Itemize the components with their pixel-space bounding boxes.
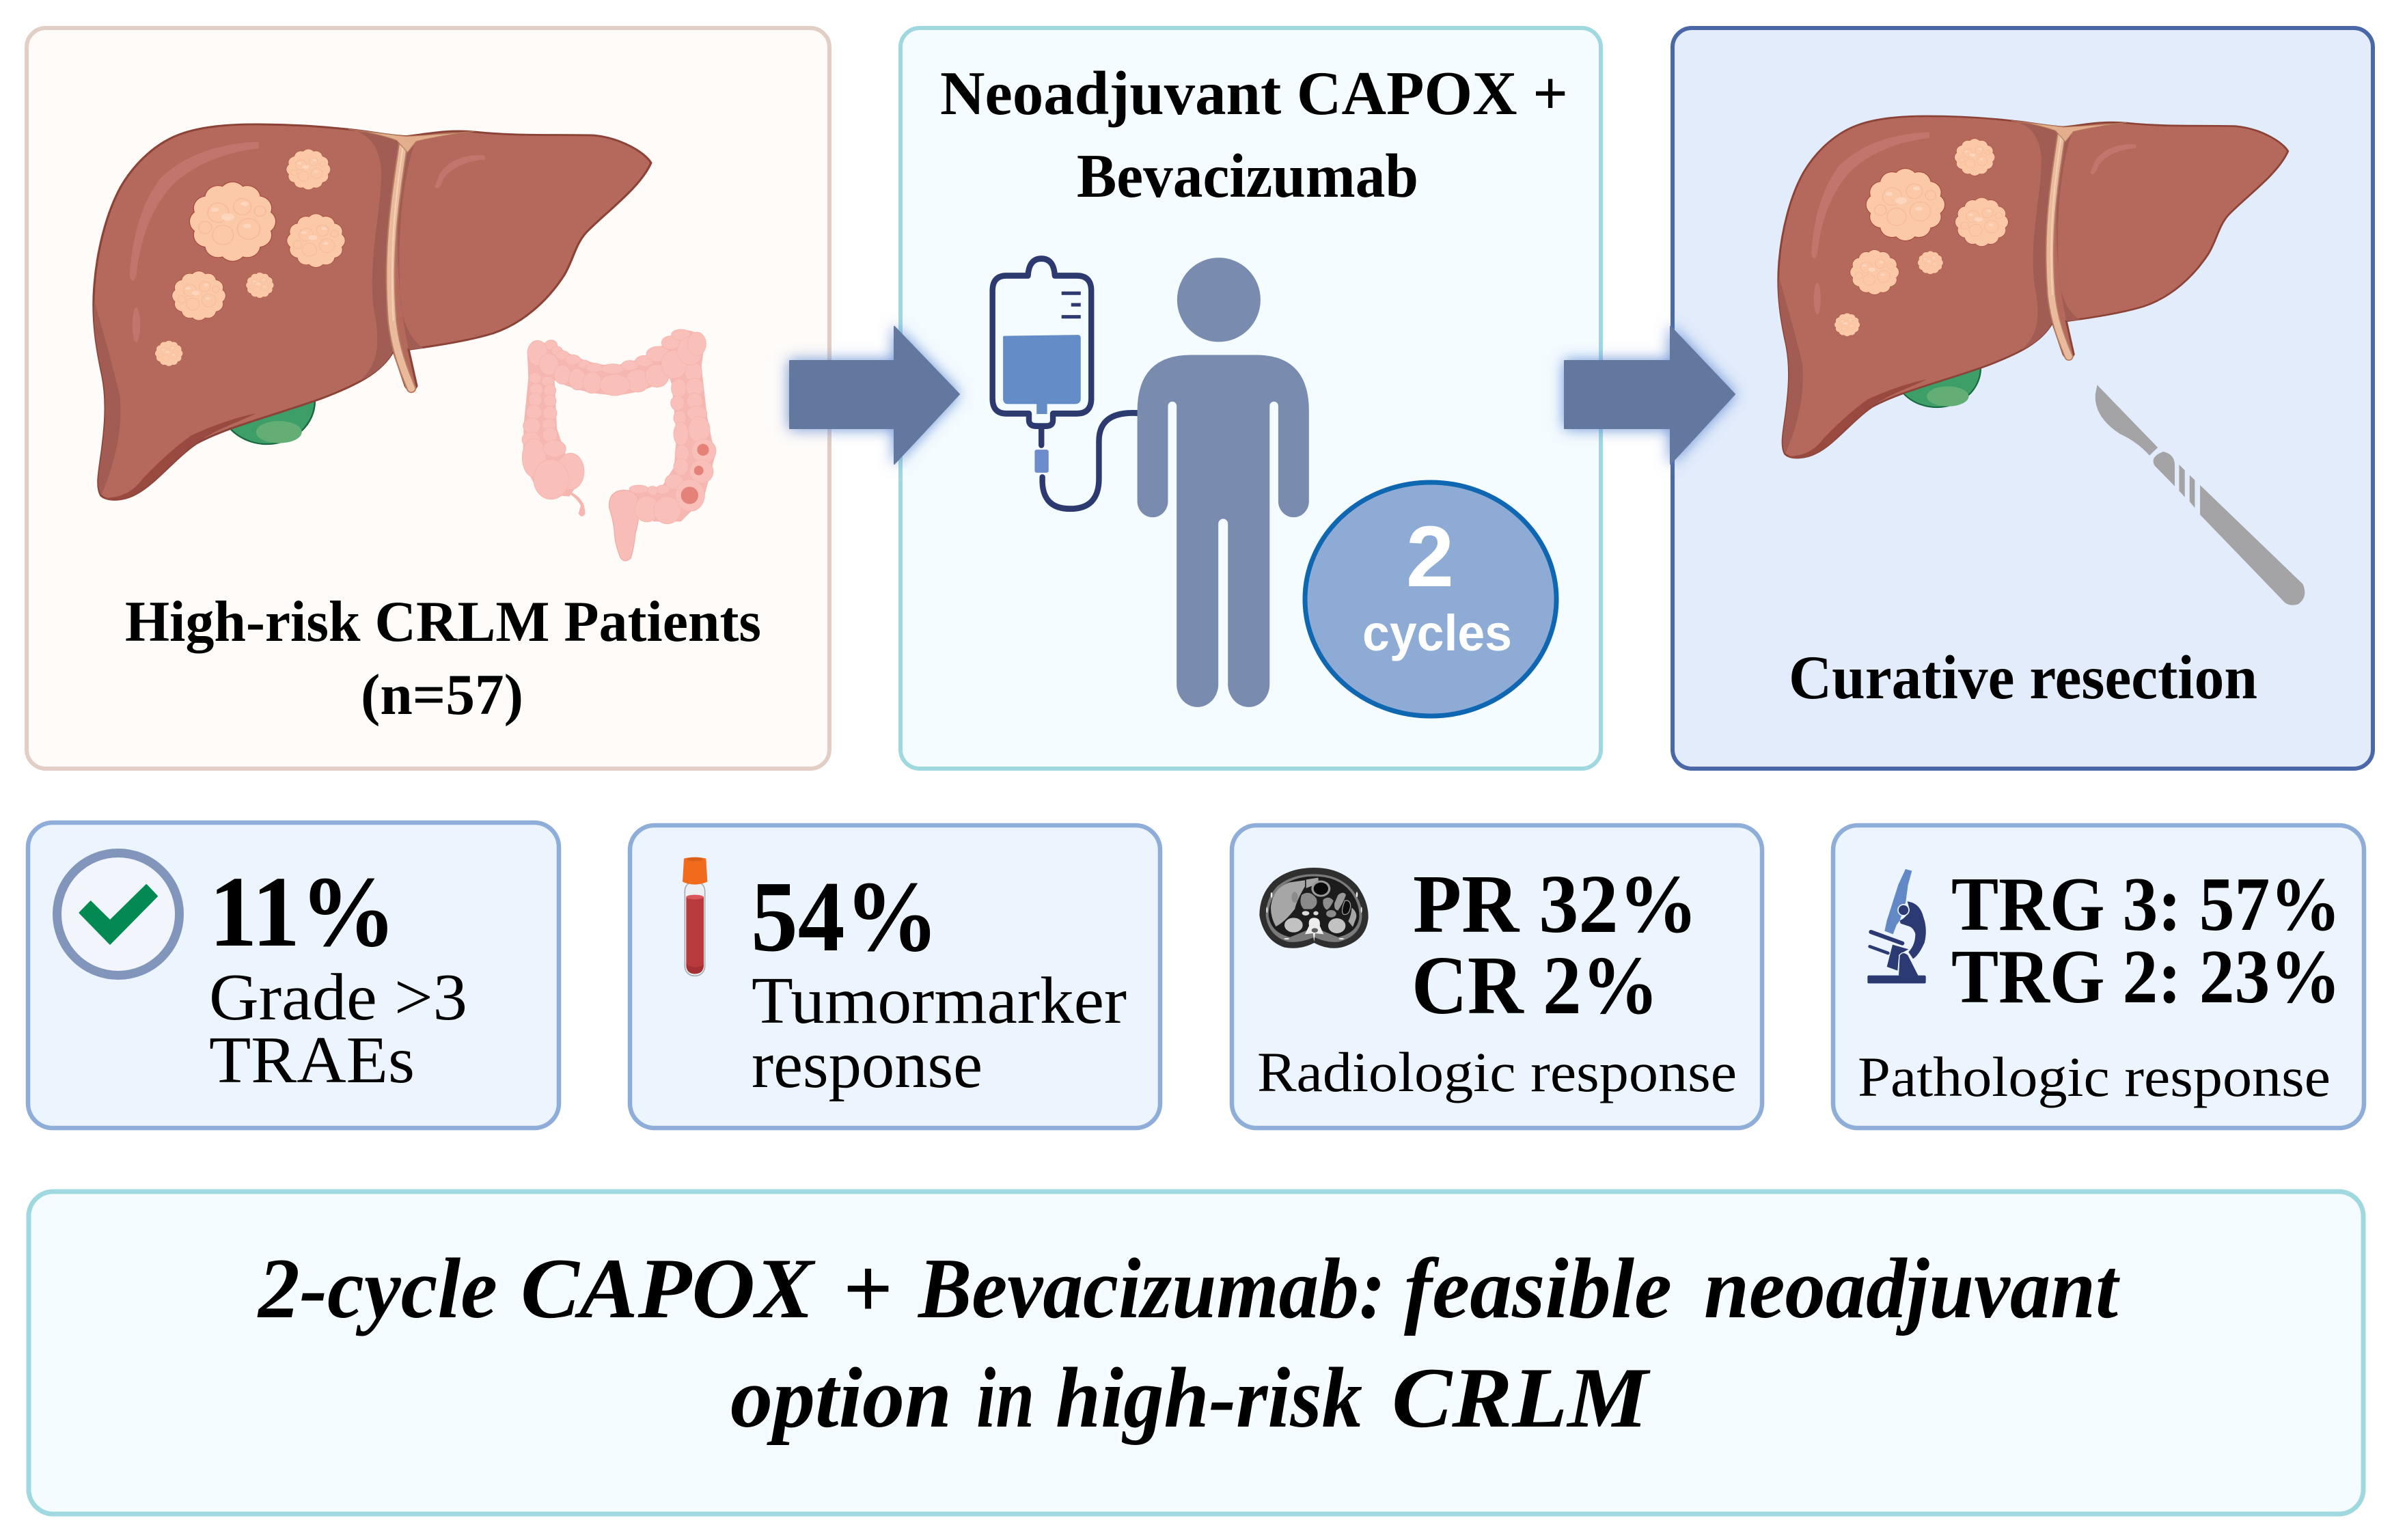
text: conclusion: feasible	[1404, 1241, 1672, 1336]
arrow: patients to treatment	[790, 327, 959, 464]
text: PR and CR rates: CR 2%	[1412, 939, 1659, 1032]
text: conclusion: CAPOX	[521, 1241, 816, 1336]
icon: liver with metastases	[94, 124, 651, 500]
text: 54 percent	[751, 861, 1127, 1101]
panel: curative resection	[1673, 28, 2373, 769]
callout: 2 cycles: cycles	[1362, 605, 1512, 661]
icon: colon with tumors	[522, 329, 716, 561]
text: 11 percent: Grade >3	[209, 961, 467, 1034]
panel: conclusion	[29, 1192, 2363, 1514]
heading: neoadjuvant regimen	[940, 59, 1568, 210]
heading: patients	[125, 590, 761, 727]
icon: scalpel	[2095, 385, 2305, 605]
text: conclusion: +	[842, 1241, 892, 1336]
panel: neoadjuvant treatment	[901, 28, 1601, 769]
text: conclusion: option	[730, 1351, 952, 1446]
text: 54 percent: response	[752, 1028, 982, 1101]
text: TRG rates: TRG 2: 23%	[1951, 935, 2341, 1019]
text: 11 percent: 11%	[209, 856, 396, 968]
card: radiologic response	[1232, 825, 1762, 1128]
heading: patients: (n=57)	[361, 663, 523, 727]
arrow: treatment to resection	[1565, 327, 1735, 464]
card: adverse events	[28, 823, 559, 1128]
text: 54 percent: 54%	[751, 861, 939, 973]
text: conclusion: 2-cycle	[257, 1241, 497, 1336]
icon: patient figure	[1138, 258, 1309, 707]
text: conclusion: CRLM	[1392, 1351, 1651, 1446]
text: conclusion: Bevacizumab:	[917, 1241, 1386, 1336]
panel: high-risk CRLM patients	[27, 28, 829, 769]
heading: curative resection: Curative resection	[1789, 643, 2257, 712]
heading: patients: High-risk CRLM Patients	[125, 590, 761, 654]
card: tumor marker response	[630, 825, 1160, 1128]
text: conclusion: in	[976, 1351, 1034, 1446]
icon: check mark	[57, 853, 179, 976]
text: PR and CR rates: PR 32%	[1413, 858, 1698, 950]
text: TRG rates	[1858, 862, 2341, 1108]
text: 54 percent: Tumormarker	[752, 964, 1127, 1037]
text: 11 percent	[209, 856, 467, 1097]
text: conclusion: neoadjuvant	[1704, 1241, 2121, 1336]
callout: 2 cycles: 2	[1406, 508, 1454, 605]
text: conclusion	[257, 1241, 2121, 1446]
text: PR and CR rates	[1257, 858, 1737, 1103]
icon: blood tube	[683, 857, 707, 976]
card: pathologic response	[1833, 825, 2364, 1128]
text: PR and CR rates: Radiologic response	[1257, 1041, 1737, 1103]
text: TRG rates: TRG 3: 57%	[1951, 862, 2341, 947]
text: TRG rates: Pathologic response	[1858, 1045, 2331, 1108]
text: conclusion: high-risk	[1056, 1351, 1362, 1446]
heading: neoadjuvant regimen: Neoadjuvant CAPOX +	[940, 59, 1568, 128]
icon: liver with metastases	[1778, 116, 2288, 458]
callout: 2 cycles	[1305, 482, 1556, 716]
icon: infusion bag with tube	[993, 259, 1138, 509]
heading: neoadjuvant regimen: Bevacizumab	[1077, 141, 1418, 210]
icon: microscope	[1867, 869, 1926, 983]
icon: CT scan	[1259, 868, 1369, 948]
text: 11 percent: TRAEs	[209, 1023, 415, 1097]
